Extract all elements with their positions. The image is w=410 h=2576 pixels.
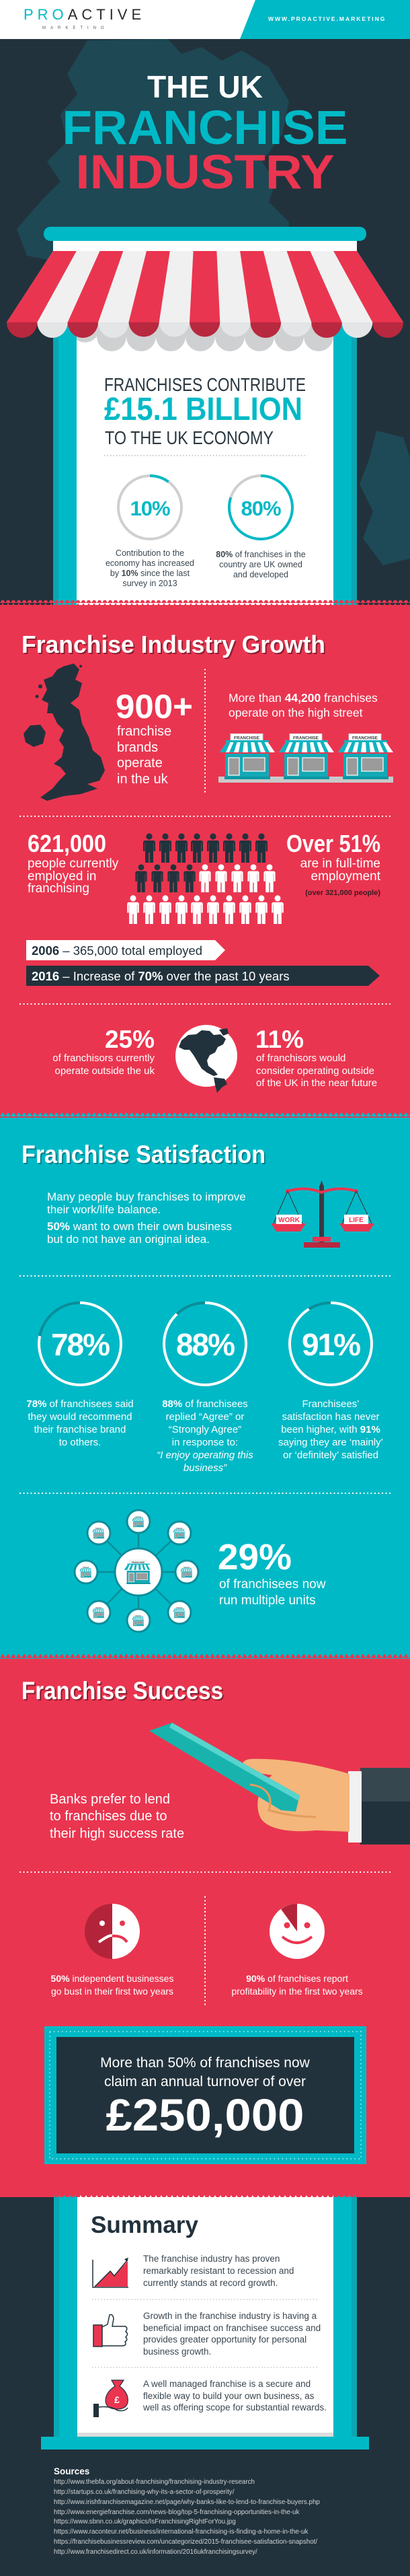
stat: over 51% full-time: employment: [311, 869, 381, 884]
arrow bar: 2006: 2006 – 365,000 total employed: [32, 943, 202, 958]
stat: 78% recommend: their franchise brand: [34, 1424, 126, 1435]
stat: 621,000 employed: people currently: [28, 857, 119, 871]
title: FRANCHISE: [62, 102, 348, 155]
stat: 29% multiple units: of franchisees now: [219, 1577, 326, 1591]
stat: over 51% full-time: Over 51%: [286, 830, 380, 857]
arrow bar: 2006: [26, 940, 225, 960]
stat: 91% satisfied: Franchisees’: [302, 1398, 360, 1410]
icon: work/life scale: LIFE: [349, 1217, 364, 1224]
text: 50% go bust: 50% independent businesses: [51, 1973, 173, 1984]
text: summary item 3: well as offering scope for substantial rewards.: [142, 2402, 327, 2412]
sources: [54, 2466, 320, 2556]
icon: sad face: [85, 1904, 140, 1959]
stat: 29% multiple units: [218, 1537, 326, 1608]
arrow bar: 2016: [26, 966, 380, 986]
stat: 10% ring: economy has increased: [106, 559, 194, 568]
stat: 44,200 high street: operate on the high street: [229, 706, 363, 719]
stat: 10% ring: [106, 476, 194, 588]
text: summary item 2: beneficial impact on franchisee success and: [143, 2323, 321, 2333]
icon: UK map: [24, 664, 105, 801]
icon: work/life scale: WORK: [278, 1217, 300, 1224]
stat: 78% recommend: they would recommend: [28, 1411, 132, 1423]
heading: satisfaction: Franchise Satisfaction: [23, 1142, 267, 1170]
stat: 621,000 employed: franchising: [28, 882, 89, 896]
callout: turnover £250,000: claim an annual turnover of over: [104, 2074, 306, 2089]
callout: turnover £250,000: [44, 2026, 366, 2164]
icon: work/life scale: [271, 1180, 374, 1248]
sources: http://www.franchisedirect.co.uk/information/2016ukfranchisingsurvey/: [54, 2548, 257, 2556]
stat: 44,200 high street: More than 44,200 franchises: [229, 691, 378, 705]
heading: growth: Franchise Industry Growth: [23, 632, 327, 659]
stat: 91% satisfied: 91%: [302, 1327, 360, 1362]
icon: happy face: [270, 1904, 325, 1959]
stat: 80% ring: 80% of franchises in the: [216, 550, 306, 559]
stat: 29% multiple units: 29%: [218, 1537, 292, 1577]
section: franchise success: [0, 1654, 410, 2197]
icon: globe: [175, 1025, 237, 1093]
text: summary item 3: A well managed franchise is a secure and: [143, 2379, 311, 2389]
icon: thumbs up: [93, 2315, 128, 2347]
heading: success: Franchise Success: [22, 1677, 223, 1705]
stat: 88% enjoy: “I enjoy operating this: [157, 1450, 253, 1461]
stat: 11% consider: of franchisors would: [256, 1052, 345, 1064]
stat: 11% consider: consider operating outside: [256, 1065, 374, 1077]
stat: over 51% full-time: (over 321,000 people): [305, 889, 380, 897]
arrow bar: 2016: 2016 – Increase of 70% over the past 10 years: [32, 969, 290, 983]
text: summary item 2: Growth in the franchise industry is having a: [143, 2311, 317, 2321]
stat: 91% satisfied: [278, 1303, 383, 1461]
stat: over 51% full-time: are in full-time: [300, 857, 380, 871]
stat: 25% outside uk: operate outside the uk: [55, 1065, 155, 1077]
title: [62, 69, 348, 199]
callout: turnover £250,000: More than 50% of franchises now: [100, 2055, 311, 2071]
stat: 80% ring: country are UK owned: [219, 560, 302, 569]
stat: 88% enjoy: 88%: [176, 1327, 235, 1362]
heading: satisfaction: Franchise Satisfaction: [22, 1141, 265, 1168]
stat: 900+ brands: franchise: [117, 724, 171, 739]
text: work/life balance: 50% want to own their own business: [47, 1220, 232, 1233]
text: summary item 1: remarkably resistant to recession and: [143, 2266, 294, 2276]
text: work/life balance: Many people buy franchises to improve: [47, 1190, 246, 1203]
stat: 29% multiple units: run multiple units: [219, 1594, 316, 1608]
stat: 621,000 employed: [28, 830, 119, 896]
sources: https://www.raconteur.net/business/international-franchising-is-finding-a-home-in-the-uk: [54, 2528, 309, 2536]
stat: 900+ brands: brands: [117, 740, 158, 755]
hero background map: [17, 39, 289, 276]
icon: hand with money: [149, 1723, 410, 1845]
text: 90% profitable: profitability in the first two years: [231, 1986, 363, 1997]
website url: WWW.PROACTIVE.MARKETING: [268, 15, 386, 22]
stat: 91% satisfied: or ‘definitely’ satisfied: [283, 1450, 378, 1461]
text: banks prefer to lend: Banks prefer to lend: [50, 1792, 170, 1807]
stat: 900+ brands: [116, 688, 193, 787]
stat: 10% ring: 10%: [130, 497, 170, 520]
text: summary item 3: flexible way to build your own business, as: [143, 2391, 315, 2401]
stat: 91% satisfied: saying they are ‘mainly’: [278, 1437, 383, 1448]
stat: 78% recommend: 78% of franchisees said: [26, 1398, 134, 1410]
sources: http://www.irishfranchisemagazine.net/page/why-banks-like-to-lend-to-franchise-buyers.php: [54, 2499, 320, 2506]
stat: 80% ring: and developed: [233, 570, 288, 579]
stat: 78% recommend: 78%: [51, 1327, 110, 1362]
stat: 88% enjoy: replied “Agree” or: [166, 1411, 244, 1423]
awning: [7, 227, 403, 351]
stat: 80% ring: [216, 476, 306, 579]
callout: turnover £250,000: £250,000: [106, 2090, 304, 2141]
economy contribution headline: £15.1 BILLION: [104, 392, 302, 427]
text: banks prefer to lend: their high success rate: [50, 1826, 184, 1841]
economy contribution headline: FRANCHISES CONTRIBUTE: [104, 374, 306, 395]
heading: growth: Franchise Industry Growth: [22, 631, 325, 658]
stat: 25% outside uk: of franchisors currently: [52, 1052, 155, 1064]
icon: money bag in hand: [93, 2380, 128, 2417]
sources: http://www.energiefranchise.com/news-blog/top-5-franchising-opportunities-in-the-uk: [54, 2509, 299, 2516]
stat: 88% enjoy: [157, 1303, 253, 1474]
text: work/life balance: but do not have an original idea.: [47, 1233, 210, 1246]
stat: 621,000 employed: employed in: [28, 869, 96, 884]
section: franchise industry growth: [0, 600, 410, 1118]
stat: 88% enjoy: business”: [183, 1462, 227, 1474]
text: summary item 1: The franchise industry has proven: [143, 2254, 280, 2264]
stat: 91% satisfied: satisfaction has never: [282, 1411, 380, 1423]
text: summary item 2: provides greater opportunity for personal: [143, 2334, 306, 2345]
header bar: [0, 0, 410, 39]
stat: 621,000 employed: 621,000: [28, 830, 106, 857]
sources: http://www.thebfa.org/about-franchising/franchising-industry-research: [54, 2478, 255, 2486]
logo: PROACTIVE: [24, 6, 145, 23]
stat: 10% ring: by 10% since the last: [110, 569, 190, 578]
stat: 91% satisfied: been higher, with 91%: [281, 1424, 380, 1435]
stat: 25% outside uk: 25%: [105, 1026, 155, 1053]
text: work/life balance: their work/life balance.: [47, 1203, 161, 1216]
panel: summary: [0, 2192, 410, 2449]
stat: 10% ring: survey in 2013: [122, 579, 177, 588]
text: 50% go bust: go bust in their first two years: [51, 1986, 173, 1997]
stat: 78% recommend: [26, 1303, 134, 1448]
heading: success: Franchise Success: [23, 1678, 224, 1706]
section: franchise satisfaction: [0, 1113, 410, 1659]
stat: 88% enjoy: “Strongly Agree”: [169, 1424, 241, 1435]
stat: 900+ brands: operate: [117, 756, 163, 771]
heading: summary: Summary: [91, 2212, 199, 2238]
economy contribution headline: TO THE UK ECONOMY: [105, 427, 274, 448]
sources: http://startups.co.uk/franchising-why-its-a-sector-of-prosperity/: [54, 2489, 235, 2496]
stat: over 51% full-time: [286, 830, 381, 897]
stat: 11% consider: 11%: [255, 1026, 304, 1053]
icon: multi-unit network: [75, 1510, 198, 1632]
shop frame: hero: [53, 316, 357, 606]
stat: 25% outside uk: [52, 1026, 155, 1077]
text: summary item 1: currently stands at record growth.: [143, 2278, 278, 2288]
sources: https://www.sbnn.co.uk/graphics/IsFranchisingRightForYou.jpg: [54, 2518, 236, 2526]
icon: three franchise shops: [218, 734, 393, 783]
stat: 88% enjoy: 88% of franchisees: [162, 1398, 248, 1410]
sources: Sources: [54, 2466, 89, 2476]
stat: 11% consider: [255, 1026, 377, 1089]
stat: 900+ brands: in the uk: [117, 772, 169, 787]
stat: 10% ring: Contribution to the: [116, 548, 184, 558]
icon: growth chart: [93, 2258, 128, 2287]
title: THE UK: [147, 69, 263, 104]
logo: [24, 6, 145, 30]
people pictogram: [127, 833, 284, 924]
icon: money bag in hand: £: [114, 2394, 120, 2405]
text: summary item 2: business growth.: [143, 2347, 211, 2357]
stat: 88% enjoy: in response to:: [172, 1437, 238, 1448]
stat: 900+ brands: 900+: [116, 688, 193, 725]
text: 90% profitable: 90% of franchises report: [246, 1973, 348, 1984]
sources: https://franchisebusinessreview.com/uncategorized/2015-franchisee-satisfaction-snapshot/: [54, 2538, 317, 2546]
stat: 11% consider: of the UK in the near future: [256, 1077, 377, 1089]
logo: MARKETING: [42, 26, 109, 30]
stat: 78% recommend: to others.: [59, 1437, 101, 1448]
text: banks prefer to lend: to franchises due to: [50, 1809, 167, 1824]
economy contribution headline: [104, 374, 306, 448]
stat: 80% ring: 80%: [241, 497, 281, 520]
title: INDUSTRY: [75, 146, 335, 199]
